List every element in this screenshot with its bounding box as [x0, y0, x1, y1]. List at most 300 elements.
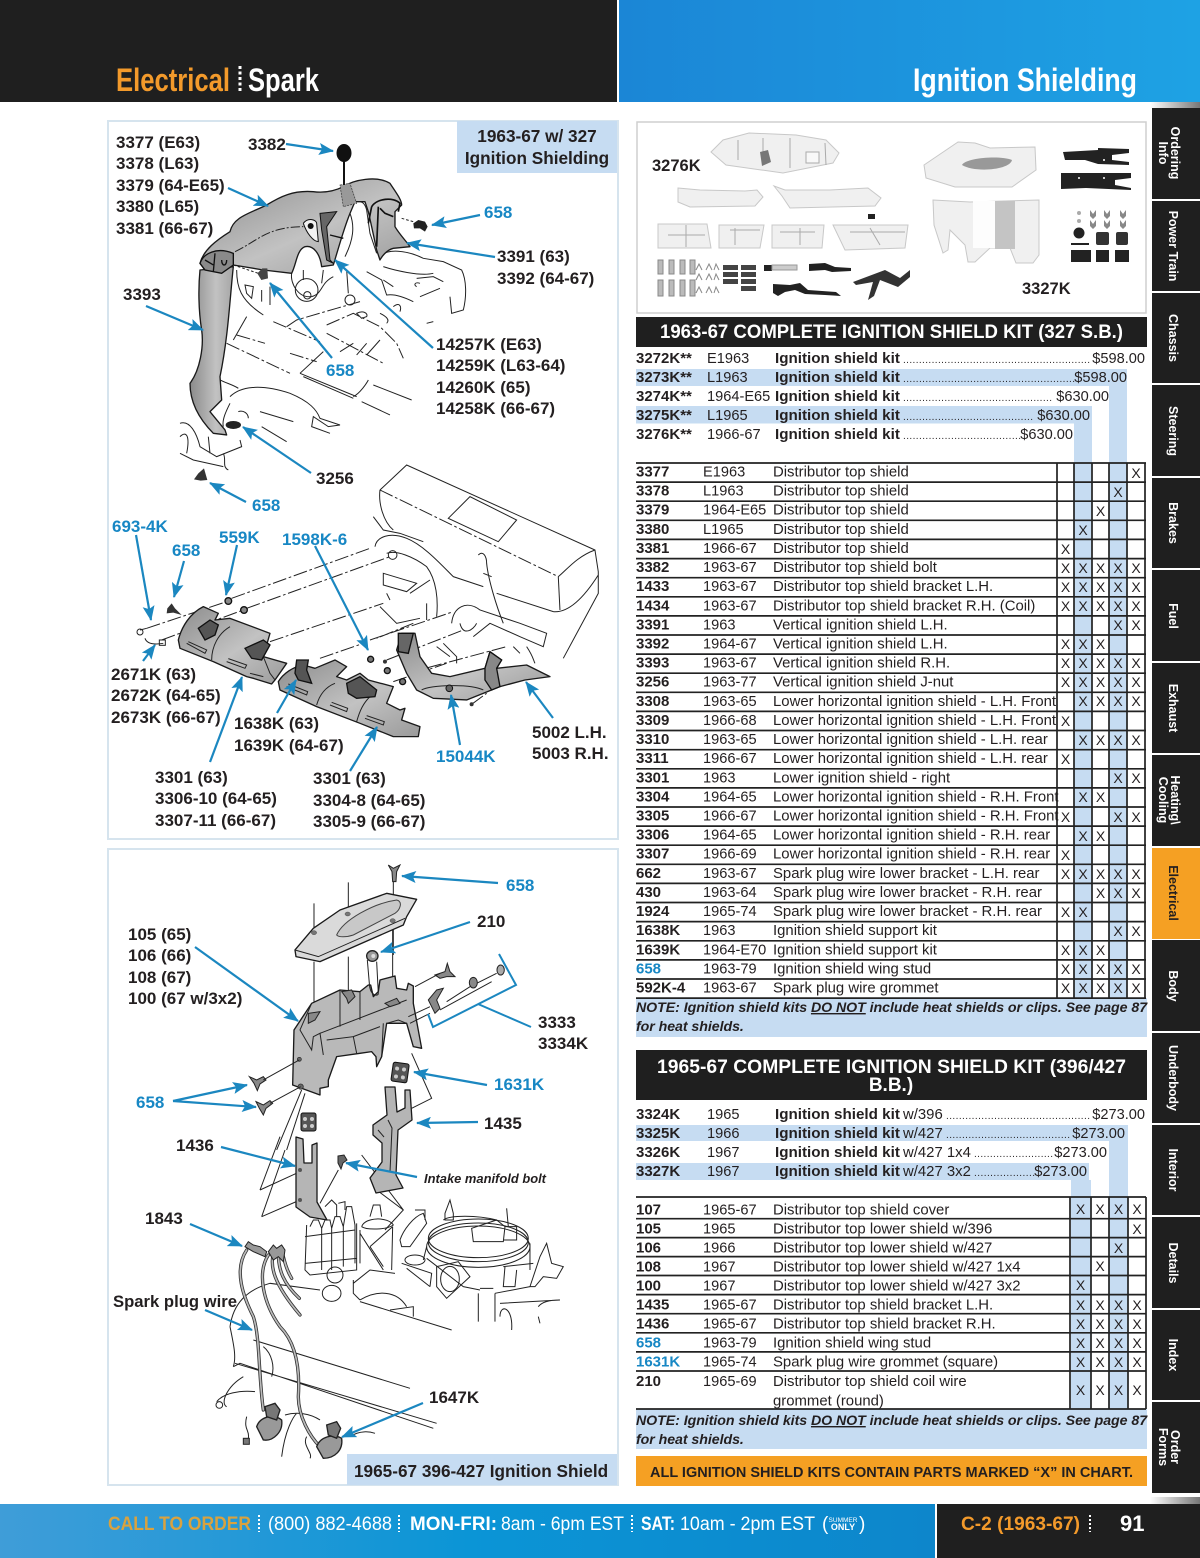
- row 1639K: X: [1078, 942, 1088, 958]
- row 3393: X: [1061, 655, 1071, 671]
- footer: saturday hours: ): [859, 1514, 865, 1535]
- tab: Steering: [1152, 385, 1200, 476]
- table grid: 327 parts: [636, 463, 1146, 998]
- row 658: [636, 960, 1141, 977]
- arrow: 1647K: [342, 1403, 423, 1437]
- callout: kit contents bar: [636, 1456, 1147, 1486]
- tab: Order Forms: [1152, 1402, 1200, 1493]
- row 1924: X: [1078, 904, 1088, 920]
- note: 396/427 table: NOTE: Ignition shield kits DO NOT include heat shields or clips. See page 87: [636, 1413, 1148, 1429]
- drawing: engine line art upper: [180, 201, 466, 470]
- arrow: 3301 left: [210, 677, 242, 762]
- row 210: 1965-69: [703, 1374, 757, 1390]
- row 3305: 1966-67: [703, 808, 757, 824]
- callout: kit contents bar: ALL IGNITION SHIELD KITS CONTAIN PARTS MARKED “X” IN CHART.: [650, 1465, 1133, 1481]
- row 108: Distributor top lower shield w/427 1x4: [773, 1260, 1020, 1276]
- row 210: X: [1114, 1382, 1124, 1398]
- sidebar tabs: [1150, 102, 1200, 1504]
- row 3306: Lower horizontal ignition shield - R.H. rear: [773, 828, 1050, 844]
- arrow: 1631K: [414, 1072, 487, 1085]
- row 3256: 1963-77: [703, 675, 757, 691]
- kit row 3275K: $630.00: [1037, 408, 1090, 424]
- row 1436: X: [1132, 1316, 1142, 1332]
- footer: saturday hours: ONLY: [831, 1522, 855, 1532]
- row 3377: X: [1131, 465, 1141, 481]
- row 107: [636, 1201, 1142, 1218]
- panel title box: 1965-67 396-427 Ignition Shield: [354, 1461, 608, 1481]
- part: grommet 210: [367, 951, 378, 995]
- row 3256: X: [1078, 674, 1088, 690]
- heading: 327 S.B. kit: 1963-67 COMPLETE IGNITION SHIELD KIT (327 S.B.): [660, 322, 1123, 343]
- row 3256: Vertical ignition shield J-nut: [773, 675, 954, 691]
- arrow: 658 middle: [270, 283, 332, 358]
- row 592K-4: X: [1061, 980, 1071, 996]
- label: 1647K: 1647K: [429, 1388, 480, 1407]
- drawing: engine line art lower: [216, 1137, 563, 1458]
- part: lower shield R.H.: [397, 633, 550, 700]
- label: 3333 3334K: 3333: [538, 1013, 576, 1032]
- label: 1638K group: [234, 714, 344, 755]
- row 3382: X: [1061, 560, 1071, 576]
- kit row 3326K: .........................: [974, 1149, 1053, 1160]
- kit row 3275K: [636, 407, 1090, 424]
- row 3310: 3310: [636, 731, 669, 748]
- panel title box: 1963-67 w/ 327: [477, 126, 597, 146]
- row 1638K: X: [1131, 923, 1141, 939]
- row 3379: 3379: [636, 502, 669, 519]
- row 1433: X: [1113, 579, 1123, 595]
- label: 14257K group: 14260K (65): [436, 378, 531, 397]
- row 3256: X: [1096, 674, 1106, 690]
- callouts for panel 2: [113, 876, 589, 1437]
- arrow: 2671K: [143, 645, 155, 661]
- photo: 3327K kit parts: [924, 142, 1131, 263]
- row 662: X: [1061, 866, 1071, 882]
- row 1436: 1436: [636, 1316, 669, 1332]
- heading separator: [238, 66, 242, 92]
- footer: saturday hours: 10am - 2pm EST: [680, 1514, 815, 1535]
- row 3308: X: [1096, 693, 1106, 709]
- row 3256: X: [1131, 674, 1141, 690]
- kit row 3272K: Ignition shield kit: [775, 350, 900, 367]
- kit row 3275K: L1965: [707, 408, 748, 424]
- tab: Chassis: [1152, 293, 1200, 383]
- row 1435: [636, 1296, 1142, 1314]
- row 1434: [636, 597, 1141, 614]
- kit row 3276K: 3276K**: [636, 426, 692, 443]
- row 105: Distributor top lower shield w/396: [773, 1222, 992, 1238]
- row 1631K: Spark plug wire grommet (square): [773, 1354, 998, 1370]
- footer: section code: C-2 (1963-67): [961, 1514, 1080, 1535]
- tab: Exhaust: Exhaust: [1166, 684, 1180, 733]
- arrow: 1638K: [277, 680, 296, 713]
- row 430: 1963-64: [703, 885, 757, 901]
- row 658: X: [1131, 961, 1141, 977]
- row 3381: 1966-67: [703, 541, 757, 557]
- row 3392: X: [1061, 636, 1071, 652]
- arrow: 210: [381, 922, 470, 952]
- kit row 3272K: ...........................................................: [903, 355, 1090, 366]
- kit row 3276K: Ignition shield kit: [775, 426, 900, 443]
- row 1924: [636, 903, 1088, 920]
- row 3381: [636, 540, 1071, 557]
- panel title box: [347, 1454, 617, 1485]
- tab: Underbody: Underbody: [1166, 1045, 1180, 1111]
- label: 3382: 3382: [248, 135, 286, 154]
- note: 396/427 table: [636, 1413, 1148, 1448]
- tab: Exhaust: [1152, 663, 1200, 753]
- tab: Interior: [1152, 1125, 1200, 1215]
- kit row 3324K: .............................................: [946, 1111, 1090, 1122]
- row 658: Ignition shield wing stud: [773, 961, 931, 977]
- row 100: [636, 1277, 1086, 1294]
- part: fastener hardware: [263, 965, 504, 1150]
- label: 693-4K: 693-4K: [112, 517, 168, 536]
- row 210: Distributor top shield coil wire: [773, 1374, 967, 1390]
- row 3309: [636, 712, 1071, 729]
- label: 1598K-6: 1598K-6: [282, 530, 347, 549]
- row 3301: X: [1131, 770, 1141, 786]
- row 3311: 3311: [636, 750, 669, 767]
- kit row 3325K: [636, 1125, 1125, 1142]
- tab: Fuel: [1152, 570, 1200, 661]
- kit row 3325K: 3325K: [636, 1125, 680, 1142]
- row 3382: 3382: [636, 559, 669, 576]
- row 658: 1963-79: [703, 1336, 757, 1352]
- row 1435: Distributor top shield bracket L.H.: [773, 1298, 993, 1314]
- row 106: 1966: [703, 1240, 735, 1256]
- row 3382: [636, 559, 1141, 576]
- arrow: 1598K-6: [315, 546, 368, 650]
- kit row 3324K: [636, 1106, 1145, 1123]
- table highlight strips: 327 kit: [636, 369, 1147, 1037]
- arrow: 15044K: [451, 695, 460, 745]
- kit row 3272K: $598.00: [1092, 351, 1145, 367]
- row 662: 662: [636, 865, 661, 882]
- row 1433: 1433: [636, 578, 669, 595]
- row 1434: X: [1131, 598, 1141, 614]
- kit row 3327K: ...................: [974, 1168, 1035, 1179]
- arrow: 658 left upper: [173, 1085, 247, 1101]
- arrow: 559K: [226, 545, 237, 595]
- arrow: 3301 right: [350, 727, 377, 771]
- row 3309: Lower horizontal ignition shield - L.H. Front: [773, 713, 1057, 729]
- row 592K-4: [636, 980, 1141, 996]
- row 3308: X: [1113, 693, 1123, 709]
- label: 658 top: 658: [506, 876, 534, 895]
- row 105: 1965: [703, 1222, 735, 1238]
- arrow: 3379: [228, 188, 268, 206]
- row 658: X: [1078, 961, 1088, 977]
- kit row 3274K: [636, 388, 1109, 405]
- kit row 3324K: 3324K: [636, 1106, 680, 1123]
- row 1639K: 1639K: [636, 941, 680, 958]
- label: 3377-3381 distributor shields: 3378 (L63): [116, 154, 199, 173]
- row 3378: [636, 483, 1123, 500]
- row 1924: X: [1061, 904, 1071, 920]
- row 3256: [636, 674, 1141, 691]
- kit row 3273K: Ignition shield kit: [775, 369, 900, 386]
- row 3380: 3380: [636, 521, 669, 538]
- row 3392: Vertical ignition shield L.H.: [773, 636, 948, 652]
- row 107: 1965-67: [703, 1202, 757, 1218]
- row 1631K: X: [1095, 1354, 1105, 1370]
- row 3377: Distributor top shield: [773, 464, 909, 480]
- label: Spark plug wire: Spark plug wire: [113, 1292, 237, 1311]
- icon: top bolt 3382: [336, 144, 352, 185]
- row 1434: X: [1061, 598, 1071, 614]
- kit row 3325K: 1966: [707, 1126, 739, 1142]
- row 3307: Lower horizontal ignition shield - R.H. rear: [773, 847, 1050, 863]
- kit row 3324K: 1965: [707, 1107, 739, 1123]
- part: shield caps and clips: [200, 183, 428, 429]
- row 210: grommet (round): [773, 1394, 884, 1410]
- part: spark plug boots and wire clip: [243, 1242, 342, 1458]
- tab: Power Train: [1152, 201, 1200, 291]
- kit row 3326K: [636, 1144, 1107, 1161]
- row 1924: Spark plug wire lower bracket - R.H. rear: [773, 904, 1042, 920]
- row 3391: [636, 616, 1141, 633]
- row 3310: X: [1113, 732, 1123, 748]
- row 108: 108: [636, 1258, 661, 1276]
- row 662: X: [1096, 866, 1106, 882]
- label: 105-100 group: 106 (66): [128, 946, 191, 965]
- row 592K-4: X: [1096, 980, 1106, 996]
- footer: saturday hours: [641, 1514, 865, 1535]
- arrow: 3391: [407, 243, 495, 257]
- tab: Heating Cooling: Heating\: [1168, 775, 1182, 825]
- kit row 3272K: E1963: [707, 351, 749, 367]
- row 1639K: 1964-E70: [703, 942, 766, 958]
- row 3310: [636, 731, 1141, 748]
- kit row 3327K: $273.00: [1034, 1164, 1087, 1180]
- row 658: 1963-79: [703, 961, 757, 977]
- row 3256: X: [1113, 674, 1123, 690]
- row 3309: X: [1061, 713, 1071, 729]
- label: 658 left: 658: [172, 541, 200, 560]
- row 3301: [636, 769, 1141, 786]
- note: 396/427 table: for heat shields.: [636, 1432, 744, 1448]
- row 3305: X: [1061, 809, 1071, 825]
- row 1434: X: [1096, 598, 1106, 614]
- tab: Ordering Info: Ordering: [1168, 127, 1182, 179]
- arrow: 658 lower: [210, 483, 246, 502]
- row 100: 1967: [703, 1278, 735, 1294]
- tab: Index: Index: [1166, 1339, 1180, 1371]
- row 3306: X: [1096, 828, 1106, 844]
- footer: weekday hours: MON-FRI:: [410, 1514, 497, 1535]
- kit row 3275K: 3275K**: [636, 407, 692, 424]
- row 1631K: X: [1132, 1354, 1142, 1370]
- row 3301: 1963: [703, 770, 735, 786]
- footer: call to order: CALL TO ORDER: [108, 1514, 251, 1535]
- row 3393: 1963-67: [703, 656, 757, 672]
- arrow: 693-4K: [136, 535, 151, 620]
- row 3307: 3307: [636, 846, 669, 863]
- row 592K-4: 592K-4: [636, 980, 686, 996]
- note: 327 table: NOTE: Ignition shield kits DO NOT include heat shields or clips. See page 87: [636, 1000, 1148, 1016]
- label: 658 left: 658: [136, 1093, 164, 1112]
- row 592K-4: X: [1131, 980, 1141, 996]
- row 3391: X: [1113, 617, 1123, 633]
- part: shield bracket 1435 and grommet 1631K: [370, 1062, 412, 1193]
- tab: Interior: Interior: [1166, 1148, 1180, 1192]
- row 106: X: [1114, 1240, 1124, 1256]
- row 107: 107: [636, 1202, 661, 1218]
- row 210: X: [1095, 1382, 1105, 1398]
- row 3381: 3381: [636, 540, 669, 557]
- row 107: X: [1132, 1201, 1142, 1217]
- footer: weekday hours: [410, 1514, 624, 1535]
- row 3377: 3377: [636, 464, 669, 480]
- row 107: Distributor top shield cover: [773, 1202, 949, 1218]
- row 430: Spark plug wire lower bracket - R.H. rear: [773, 885, 1042, 901]
- tab: Electrical: [1152, 848, 1200, 939]
- arrow: 5002: [526, 682, 553, 718]
- tab: Chassis: Chassis: [1166, 314, 1180, 362]
- kit row 3275K: .........................................: [903, 412, 1033, 423]
- row 100: 100: [636, 1278, 661, 1294]
- row 1433: X: [1061, 579, 1071, 595]
- row 107: X: [1114, 1201, 1124, 1217]
- row 658: X: [1076, 1335, 1086, 1351]
- footer: saturday hours: SUMMER: [829, 1517, 858, 1524]
- kit row 3325K: .......................................: [946, 1130, 1070, 1141]
- row 3378: X: [1113, 484, 1123, 500]
- label: 1638K group: 1639K (64-67): [234, 736, 344, 755]
- row 1639K: Ignition shield support kit: [773, 942, 938, 958]
- row 3391: X: [1131, 617, 1141, 633]
- row 3393: X: [1113, 655, 1123, 671]
- label: 3256: 3256: [316, 469, 354, 488]
- row 210: 210: [636, 1373, 661, 1390]
- label: 658 lower: 658: [252, 496, 280, 515]
- row 3310: Lower horizontal ignition shield - L.H. rear: [773, 732, 1048, 748]
- row 108: X: [1095, 1258, 1105, 1274]
- table highlight strips: 396/427 kit: [636, 1125, 1147, 1449]
- row 1433: Distributor top shield bracket L.H.: [773, 579, 993, 595]
- arrow: 658 top: [402, 876, 498, 883]
- row 3392: 1964-67: [703, 636, 757, 652]
- drawing: air cleaner and manifold line art: [137, 465, 598, 704]
- arrow: 1843: [190, 1224, 242, 1246]
- panel title box: Ignition Shielding: [465, 148, 609, 168]
- label: 5002 5003: 5002 L.H.: [532, 723, 607, 742]
- footer: weekday hours: 8am - 6pm EST: [501, 1514, 624, 1535]
- label: 3301 right group: 3305-9 (66-67): [313, 812, 425, 831]
- part: shield bracket 1436 and grommet: [296, 1113, 347, 1220]
- row 3377: [636, 464, 1141, 481]
- kit row 3327K: [636, 1163, 1087, 1180]
- kit row 3324K: w/396: [902, 1107, 943, 1123]
- kit row 3274K: Ignition shield kit: [775, 388, 900, 405]
- kit row 3326K: 1967: [707, 1145, 739, 1161]
- row 1638K: X: [1113, 923, 1123, 939]
- label: 3377-3381 distributor shields: 3381 (66-67): [116, 219, 213, 238]
- arrow: 105: [195, 947, 298, 1021]
- parts table: 396/427: [636, 1201, 1142, 1410]
- row 3392: X: [1078, 636, 1088, 652]
- row 1638K: Ignition shield support kit: [773, 923, 938, 939]
- row 1436: X: [1095, 1316, 1105, 1332]
- row 430: [636, 884, 1141, 901]
- note: 327 table: [636, 1000, 1148, 1035]
- row 658: 658: [636, 1334, 661, 1352]
- row 3309: 1966-68: [703, 713, 757, 729]
- row 1639K: X: [1096, 942, 1106, 958]
- part: distributor top shield: [190, 179, 428, 435]
- row 1924: 1965-74: [703, 904, 757, 920]
- label: 105-100 group: 108 (67): [128, 968, 191, 987]
- row 1436: Distributor top shield bracket R.H.: [773, 1316, 996, 1332]
- row 3391: Vertical ignition shield L.H.: [773, 617, 948, 633]
- row 658: Ignition shield wing stud: [773, 1336, 931, 1352]
- kit row 3272K: [636, 350, 1145, 367]
- label: 3391 3392: 3392 (64-67): [497, 269, 594, 288]
- row 3382: X: [1096, 560, 1106, 576]
- kit row 3274K: 3274K**: [636, 388, 692, 405]
- kit row 3325K: $273.00: [1072, 1126, 1125, 1142]
- row 1435: X: [1114, 1297, 1124, 1313]
- label: 1436: 1436: [176, 1136, 214, 1155]
- row 3393: 3393: [636, 655, 669, 672]
- label: 3391 3392: 3391 (63): [497, 247, 570, 266]
- kit row 3274K: ...............................................: [903, 393, 1052, 404]
- label: 3333 3334K: [538, 1013, 589, 1053]
- label: 14257K group: [436, 335, 565, 418]
- kit row 3327K: 1967: [707, 1164, 739, 1180]
- arrow: 3382: [286, 144, 333, 151]
- row 3301: X: [1113, 770, 1123, 786]
- row 3311: Lower horizontal ignition shield - L.H. rear: [773, 751, 1048, 767]
- row 1435: X: [1095, 1297, 1105, 1313]
- row 3306: 3306: [636, 827, 669, 844]
- tab: Steering: Steering: [1166, 406, 1180, 456]
- arrow: Spark plug wire: [205, 1310, 252, 1330]
- row 662: X: [1078, 866, 1088, 882]
- row 3304: Lower horizontal ignition shield - R.H. Front: [773, 789, 1059, 805]
- row 3391: 1963: [703, 617, 735, 633]
- row 105: X: [1132, 1221, 1142, 1237]
- row 3392: [636, 636, 1106, 652]
- kit row 3326K: $273.00: [1054, 1145, 1107, 1161]
- label: 3276K: 3276K: [652, 157, 701, 175]
- tab: Details: Details: [1166, 1242, 1180, 1284]
- arrow: 3256: [243, 427, 311, 473]
- row 1434: 1963-67: [703, 598, 757, 614]
- note: 327 table: for heat shields.: [636, 1019, 744, 1035]
- row 3393: X: [1131, 655, 1141, 671]
- row 3392: 3392: [636, 636, 669, 652]
- row 430: 430: [636, 884, 661, 901]
- row 3306: X: [1078, 828, 1088, 844]
- row 3305: Lower horizontal ignition shield - R.H. Front: [773, 808, 1059, 824]
- row 592K-4: X: [1113, 980, 1123, 996]
- label: 1638K group: 1638K (63): [234, 714, 319, 733]
- row 662: X: [1131, 866, 1141, 882]
- label: 658 middle: 658: [326, 361, 354, 380]
- heading: 396/427 B.B. kit: 1965-67 COMPLETE IGNITION SHIELD KIT (396/427: [657, 1057, 1126, 1078]
- row 3307: 1966-69: [703, 847, 757, 863]
- label: 559K: 559K: [219, 528, 260, 547]
- row 210: X: [1132, 1382, 1142, 1398]
- row 3393: X: [1078, 655, 1088, 671]
- label: 14257K group: 14259K (L63-64): [436, 356, 565, 375]
- heading: Electrical: Electrical: [116, 62, 230, 98]
- row 3304: X: [1096, 789, 1106, 805]
- tab: Brakes: [1152, 478, 1200, 568]
- row 106: Distributor top lower shield w/427: [773, 1240, 992, 1256]
